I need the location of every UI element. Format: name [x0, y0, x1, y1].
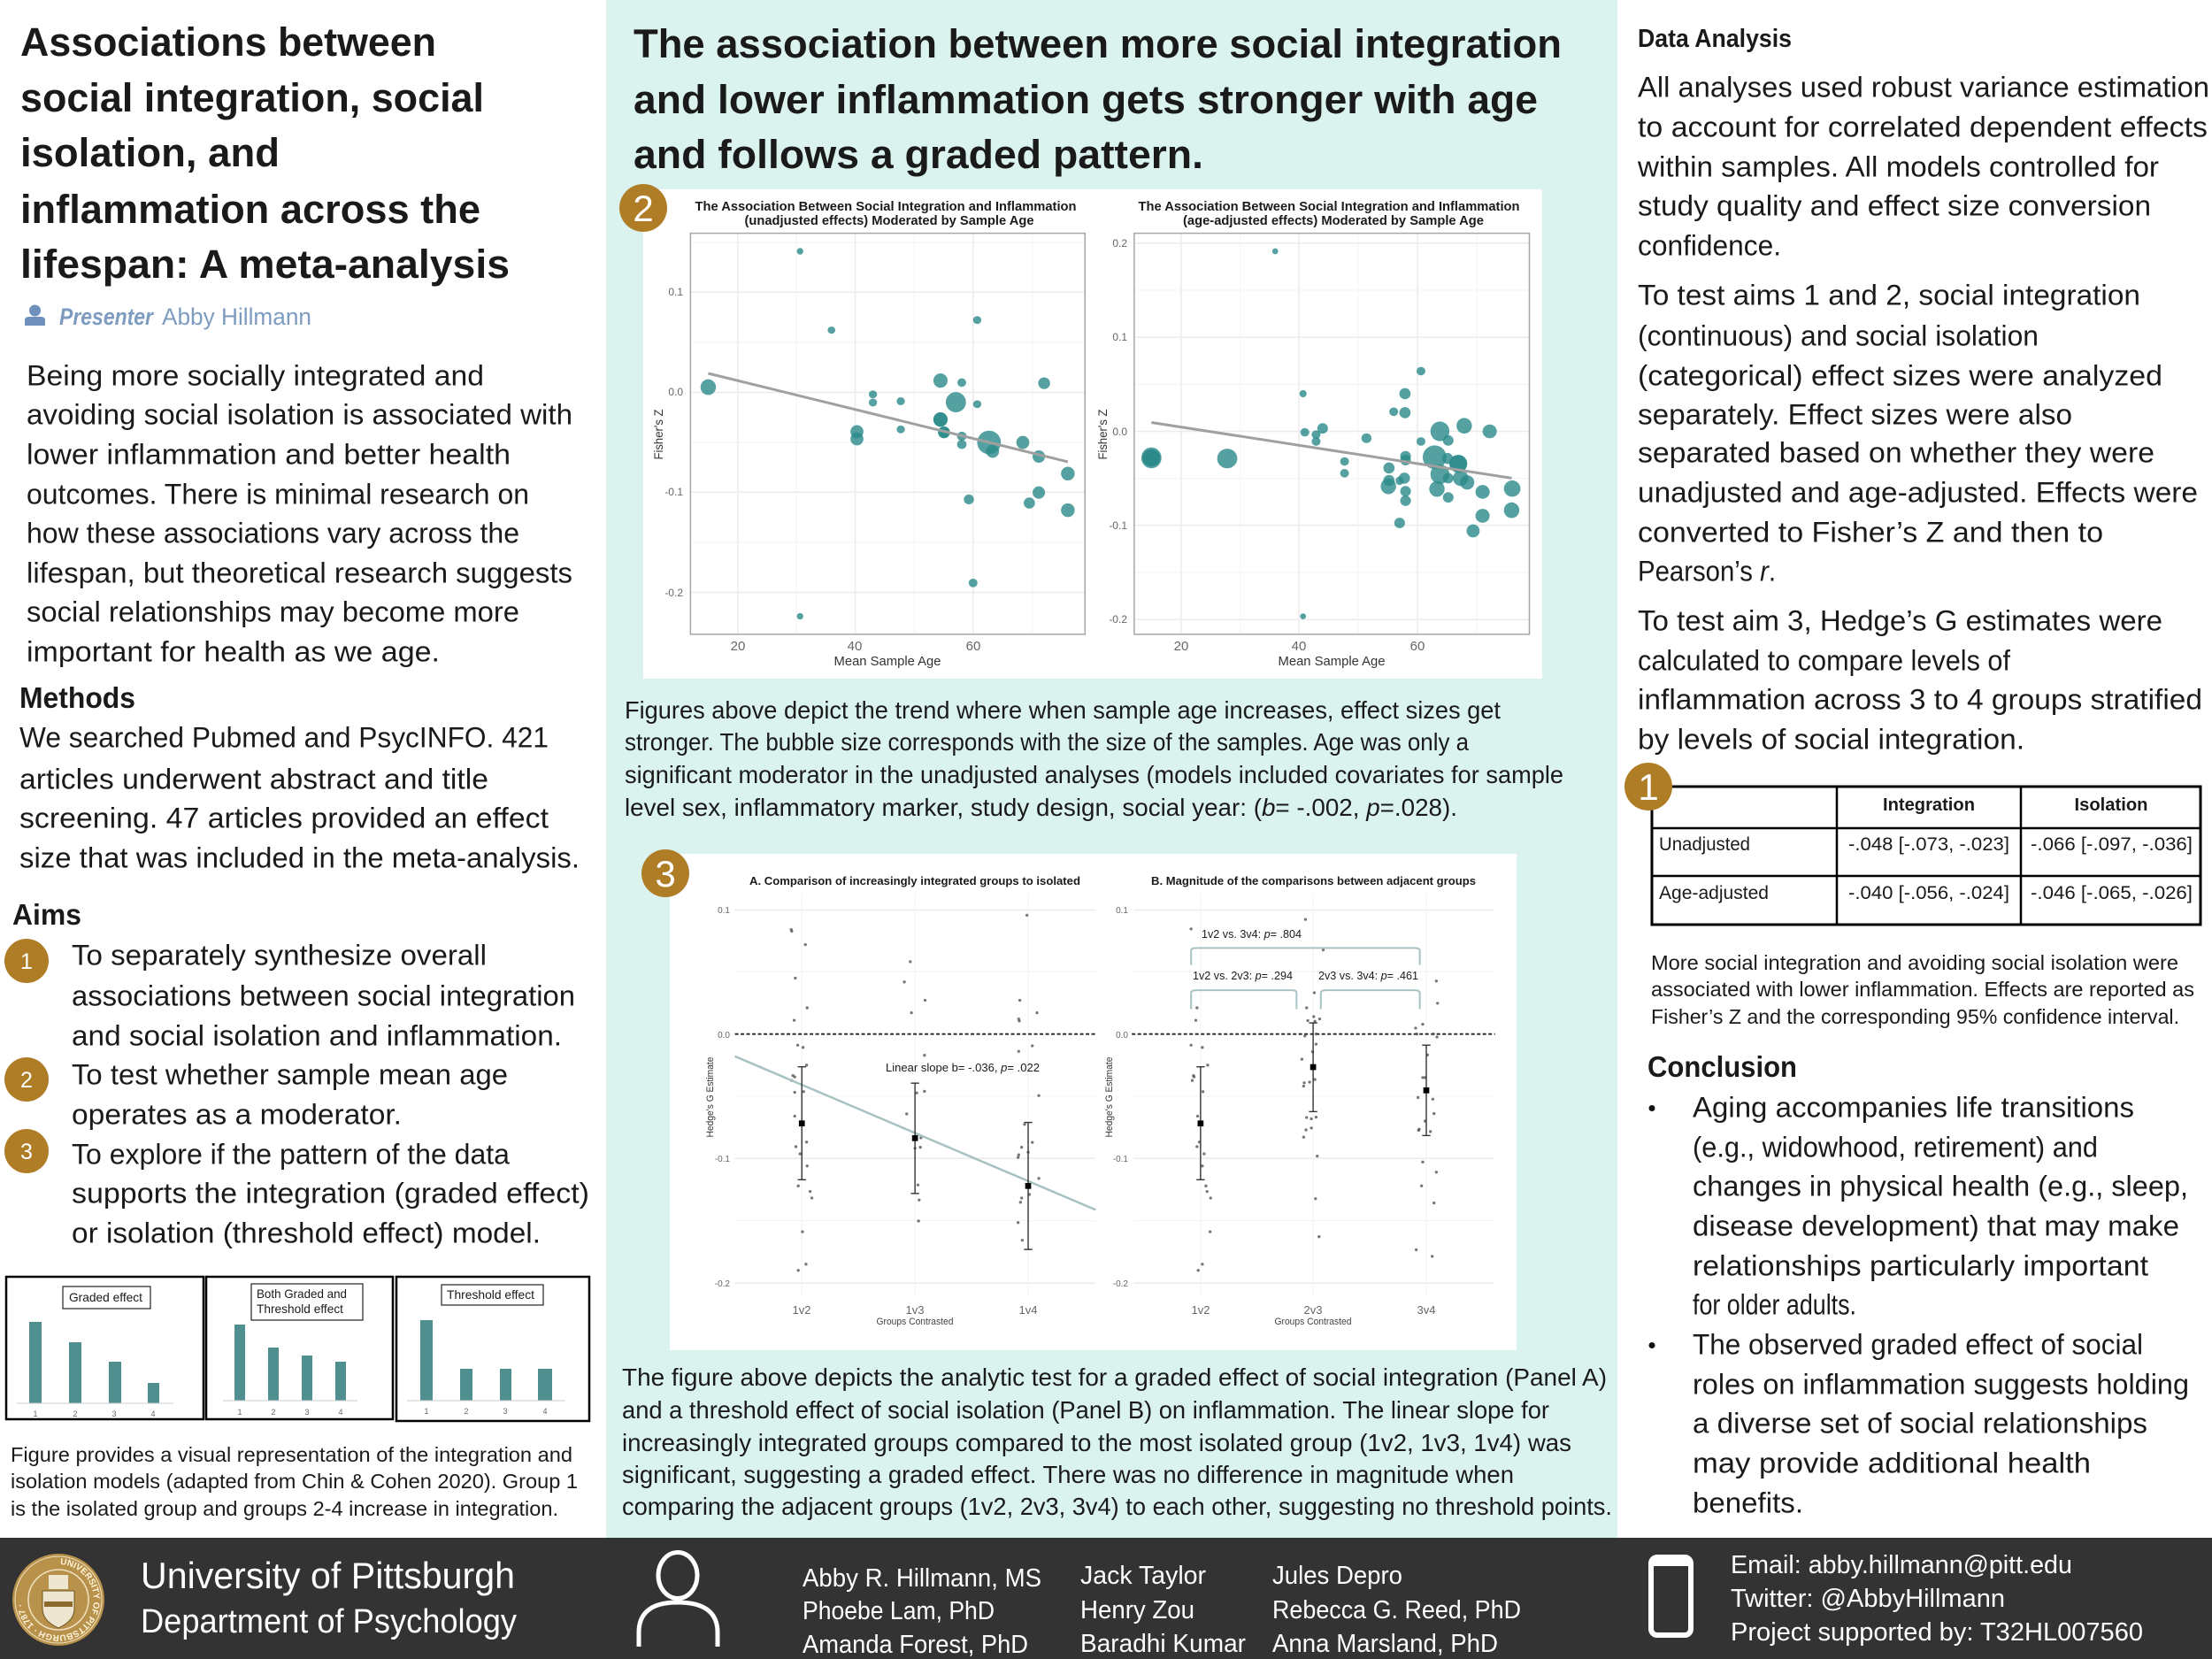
conclusion bullets: disease development) that may make: [1693, 1210, 2179, 1242]
table caption: Fisher’s Z and the corresponding 95% confidence interval.: [1651, 1005, 2179, 1028]
chart: unadjusted bubble plot: 20: [731, 639, 745, 654]
data analysis text: All analyses used robust variance estimation: [1638, 71, 2209, 103]
data analysis text: Pearson’s r.: [1638, 556, 1776, 588]
chart: panel A graded comparison: 1v2: [793, 1303, 810, 1317]
authors list: Henry Zou: [1080, 1596, 1194, 1624]
presenter line: Abby Hillmann: [162, 303, 311, 330]
icon: aim badge 1: 1: [20, 949, 33, 974]
heading: data analysis: Data Analysis: [1638, 25, 1792, 53]
chart: graded effect schematic: Graded effect: [69, 1290, 142, 1304]
data analysis text: converted to Fisher’s Z and then to: [1638, 517, 2103, 549]
aims text: associations between social integration: [72, 980, 575, 1012]
aims text: To test whether sample mean age: [72, 1058, 508, 1090]
figure 3 caption: increasingly integrated groups compared to the most isolated group (1v2, 1v3, 1v4) was: [622, 1429, 1571, 1456]
chart: panel A graded comparison: [705, 874, 1095, 1327]
table caption: associated with lower inflammation. Effects are reported as: [1651, 978, 2194, 1001]
chart: unadjusted bubble plot: Mean Sample Age: [833, 654, 941, 669]
conclusion bullets: for older adults.: [1693, 1288, 1856, 1320]
chart: age-adjusted bubble plot: 0.1: [1112, 331, 1127, 343]
chart: graded effect schematic: 4: [150, 1409, 156, 1418]
chart: unadjusted bubble plot: -0.1: [664, 486, 683, 498]
icon: table badge 1: 1: [1638, 766, 1659, 808]
chart: panel B threshold comparison: -0.2: [1113, 1279, 1128, 1289]
chart: graded effect schematic: 2: [73, 1409, 78, 1418]
icon: person outline: [639, 1552, 718, 1647]
data analysis text: separately. Effect sizes were also: [1638, 398, 2072, 430]
aims text: or isolation (threshold effect) model.: [72, 1217, 541, 1249]
intro text: [27, 359, 572, 667]
icon: aim badge 2: 2: [20, 1068, 33, 1093]
authors list: Jack Taylor: [1080, 1562, 1206, 1590]
chart: age-adjusted bubble plot: -0.1: [1109, 519, 1127, 532]
figure 3 caption: The figure above depicts the analytic test for a graded effect of social integration (Panel A): [622, 1363, 1607, 1391]
chart: panel A graded comparison: Hedge's G Estimate: [705, 1056, 716, 1138]
chart: unadjusted bubble plot: Fisher's Z: [651, 409, 665, 460]
intro text: Being more socially integrated and: [27, 359, 484, 391]
main heading: and follows a graded pattern.: [634, 132, 1203, 177]
figure 3 white panel: [670, 854, 1517, 1350]
conclusion bullets: a diverse set of social relationships: [1693, 1407, 2147, 1439]
chart: panel A graded comparison: Groups Contrasted: [876, 1317, 954, 1327]
data analysis text: calculated to compare levels of: [1638, 644, 2010, 676]
icon: phone: [1651, 1557, 1691, 1635]
chart: both graded and threshold schematic: 2: [271, 1408, 276, 1417]
table: overall effects: Unadjusted: [1659, 834, 1750, 855]
chart: age-adjusted bubble plot: -0.2: [1109, 613, 1127, 626]
authors list: Rebecca G. Reed, PhD: [1272, 1596, 1521, 1624]
data analysis text: study quality and effect size conversion: [1638, 189, 2151, 221]
chart: age-adjusted bubble plot: 0.2: [1112, 237, 1127, 250]
chart: unadjusted bubble plot: The Association Between Social Integration and Inflammation: [695, 199, 1076, 214]
panel: center column: [619, 21, 1612, 1520]
chart: panel B threshold comparison: Hedge's G Estimate: [1104, 1056, 1115, 1138]
chart: threshold effect schematic: 2: [464, 1407, 469, 1416]
intro text: important for health as we age.: [27, 635, 440, 667]
icon: figure badge 2: [619, 184, 667, 232]
aims text: and social isolation and inflammation.: [72, 1019, 562, 1051]
conclusion bullets: changes in physical health (e.g., sleep,: [1693, 1170, 2188, 1202]
icon: figure badge 3: 3: [655, 853, 676, 895]
university name: University of Pittsburgh: [141, 1555, 515, 1596]
conclusion bullets: benefits.: [1693, 1486, 1803, 1518]
chart: panel B threshold comparison: 3v4: [1417, 1303, 1435, 1317]
chart: age-adjusted bubble plot: [1095, 199, 1530, 669]
intro text: lower inflammation and better health: [27, 439, 511, 471]
methods text: size that was included in the meta-analysis.: [19, 842, 580, 874]
icon: university seal: UNIVERSITY OF PITTSBURGH · 1787 ·: [18, 1558, 100, 1641]
table: overall effects: Age-adjusted: [1659, 883, 1769, 903]
conclusion bullets: may provide additional health: [1693, 1448, 2091, 1479]
data analysis text: To test aim 3, Hedge’s G estimates were: [1638, 605, 2162, 637]
data analysis text: confidence.: [1638, 230, 1781, 262]
chart: both graded and threshold schematic: 1: [237, 1408, 242, 1417]
chart: both graded and threshold schematic: 3: [304, 1408, 310, 1417]
schematic caption: [11, 1443, 578, 1520]
chart: panel B threshold comparison: 2v3 vs. 3v4: p= .461: [1318, 969, 1418, 982]
chart: unadjusted bubble plot: 0.0: [668, 386, 683, 398]
chart: both graded and threshold schematic: 4: [338, 1408, 343, 1417]
conclusion bullets: The observed graded effect of social: [1693, 1329, 2143, 1361]
chart: panel B threshold comparison: -0.1: [1113, 1155, 1128, 1164]
methods text: We searched Pubmed and PsycINFO. 421: [19, 722, 549, 754]
chart: age-adjusted bubble plot: Mean Sample Age: [1278, 654, 1386, 669]
conclusion bullets: [1649, 1092, 2189, 1518]
presenter line: [25, 303, 311, 330]
chart: panel B threshold comparison: Groups Contrasted: [1274, 1317, 1352, 1327]
chart: age-adjusted bubble plot: The Association Between Social Integration and Inflammation: [1138, 199, 1520, 214]
contact details: Project supported by: T32HL007560: [1731, 1618, 2143, 1647]
chart: both graded and threshold schematic: [206, 1277, 393, 1419]
chart: age-adjusted bubble plot: Fisher's Z: [1095, 409, 1110, 460]
title: inflammation across the: [20, 187, 480, 232]
authors list: [803, 1562, 1521, 1659]
data analysis text: (continuous) and social isolation: [1638, 320, 2039, 352]
chart: panel A graded comparison: 1v4: [1019, 1303, 1037, 1317]
icon: table badge 1: [1624, 763, 1672, 810]
authors list: Abby R. Hillmann, MS: [803, 1564, 1041, 1593]
table: overall effects: [1652, 787, 2200, 925]
chart: panel B threshold comparison: B. Magnitude of the comparisons between adjacent groups: [1151, 874, 1476, 887]
title: isolation, and: [20, 130, 280, 175]
chart: panel A graded comparison: -0.1: [715, 1155, 730, 1164]
figure 2 caption: level sex, inflammatory marker, study design, social year: ( b= -.002, p=.028).: [625, 794, 1457, 821]
aims text: [72, 940, 589, 1249]
chart: panel A graded comparison: 0.0: [718, 1031, 730, 1041]
data analysis text: (categorical) effect sizes were analyzed: [1638, 359, 2162, 391]
figure 2 caption: Figures above depict the trend where when sample age increases, effect sizes get: [625, 696, 1501, 724]
chart: panel A graded comparison: 0.1: [718, 906, 730, 916]
authors list: Amanda Forest, PhD: [803, 1631, 1028, 1659]
chart: panel B threshold comparison: 0.0: [1116, 1031, 1128, 1041]
schematic caption: Figure provides a visual representation of the integration and: [11, 1443, 572, 1466]
chart: threshold effect schematic: Threshold effect: [447, 1287, 534, 1302]
contact details: Twitter: @AbbyHillmann: [1731, 1585, 2005, 1613]
methods text: articles underwent abstract and title: [19, 763, 488, 795]
aims text: To separately synthesize overall: [72, 940, 487, 972]
icon: aim badge 3: 3: [20, 1140, 33, 1164]
panel: right column: [1624, 25, 2209, 1518]
contact details: Email: abby.hillmann@pitt.edu: [1731, 1551, 2072, 1579]
data analysis text: To test aims 1 and 2, social integration: [1638, 280, 2140, 311]
table caption: [1651, 951, 2194, 1028]
chart: panel A graded comparison: 1v3: [906, 1303, 924, 1317]
data analysis text: [1637, 71, 2209, 756]
data analysis text: inflammation across 3 to 4 groups stratified: [1638, 683, 2202, 715]
main heading: and lower inflammation gets stronger with age: [634, 77, 1538, 122]
table: overall effects: -.046 [-.065, -.026]: [2031, 883, 2193, 903]
chart: unadjusted bubble plot: -0.2: [664, 587, 683, 599]
chart: age-adjusted bubble plot: 40: [1292, 639, 1306, 654]
chart: both graded and threshold schematic: Both Graded and: [257, 1286, 347, 1301]
heading: methods: Methods: [19, 681, 135, 714]
intro text: outcomes. There is minimal research on: [27, 478, 529, 510]
authors list: Anna Marsland, PhD: [1272, 1630, 1498, 1658]
authors list: Jules Depro: [1272, 1562, 1402, 1590]
figure 2 caption: [625, 696, 1563, 821]
chart: unadjusted bubble plot: 0.1: [668, 286, 683, 298]
footer band: [0, 1538, 2212, 1659]
figure 3 caption: comparing the adjacent groups (1v2, 2v3, 3v4) to each other, suggesting no threshold points.: [622, 1493, 1612, 1520]
chart: unadjusted bubble plot: (unadjusted effects) Moderated by Sample Age: [745, 213, 1033, 228]
data analysis text: within samples. All models controlled for: [1637, 150, 2159, 182]
table: overall effects: Integration: [1883, 795, 1975, 815]
conclusion bullets: relationships particularly important: [1693, 1249, 2148, 1281]
icon: aim badge 3: [4, 1129, 49, 1173]
contact details: [1731, 1551, 2143, 1647]
icon: aim badge 2: [4, 1057, 49, 1102]
chart: unadjusted bubble plot: 60: [966, 639, 980, 654]
chart: panel B threshold comparison: 2v3: [1304, 1303, 1322, 1317]
figure 3 caption: significant, suggesting a graded effect. There was no difference in magnitude when: [622, 1461, 1514, 1488]
intro text: social relationships may become more: [27, 596, 519, 628]
chart: panel B threshold comparison: 0.1: [1116, 906, 1128, 916]
chart: threshold effect schematic: 1: [424, 1407, 429, 1416]
title: lifespan: A meta-analysis: [20, 242, 510, 287]
conclusion bullets: (e.g., widowhood, retirement) and: [1693, 1131, 2098, 1163]
chart: both graded and threshold schematic: Threshold effect: [257, 1302, 343, 1316]
conclusion bullets: Aging accompanies life transitions: [1693, 1092, 2134, 1124]
chart: graded effect schematic: [6, 1277, 204, 1419]
chart: age-adjusted bubble plot: 60: [1410, 639, 1425, 654]
table: overall effects: -.040 [-.056, -.024]: [1848, 883, 2009, 903]
schematic caption: isolation models (adapted from Chin & Cohen 2020). Group 1: [11, 1470, 578, 1493]
title: social integration, social: [20, 75, 484, 120]
title: Associations between: [20, 19, 436, 65]
title: [20, 19, 510, 287]
figure 2 caption: stronger. The bubble size corresponds with the size of the samples. Age was only a: [625, 728, 1470, 756]
chart: threshold effect schematic: 4: [542, 1407, 548, 1416]
chart: panel A graded comparison: Linear slope b= -.036, p= .022: [886, 1061, 1040, 1074]
chart: graded effect schematic: 3: [111, 1409, 117, 1418]
figure 3 caption: and a threshold effect of social isolation (Panel B) on inflammation. The linear slope for: [622, 1396, 1549, 1424]
chart: panel B threshold comparison: 1v2 vs. 3v4: p= .804: [1202, 927, 1302, 941]
chart: panel B threshold comparison: 1v2 vs. 2v3: p= .294: [1193, 969, 1293, 982]
table caption: More social integration and avoiding social isolation were: [1651, 951, 2178, 974]
table: overall effects: -.066 [-.097, -.036]: [2031, 834, 2193, 855]
chart: age-adjusted bubble plot: 0.0: [1112, 426, 1127, 438]
chart: threshold effect schematic: 3: [503, 1407, 508, 1416]
chart: graded effect schematic: 1: [33, 1409, 38, 1418]
authors list: Phoebe Lam, PhD: [803, 1597, 995, 1625]
conclusion bullets: roles on inflammation suggests holding: [1693, 1368, 2189, 1400]
authors list: Baradhi Kumar: [1080, 1630, 1246, 1658]
intro text: avoiding social isolation is associated with: [27, 398, 572, 430]
icon: figure badge 2: 2: [633, 188, 654, 229]
aims text: To explore if the pattern of the data: [72, 1138, 510, 1170]
aims text: operates as a moderator.: [72, 1099, 402, 1131]
panel: left column: [4, 19, 589, 1520]
methods text: screening. 47 articles provided an effect: [19, 802, 549, 833]
heading: aims: Aims: [12, 898, 81, 931]
panel: center column background: [606, 0, 1617, 1538]
table: overall effects: -.048 [-.073, -.023]: [1848, 834, 2009, 855]
main heading: [634, 21, 1562, 177]
chart: panel B threshold comparison: [1104, 874, 1495, 1327]
intro text: how these associations vary across the: [27, 517, 519, 549]
chart: unadjusted bubble plot: 40: [848, 639, 862, 654]
chart: unadjusted bubble plot: [651, 199, 1085, 669]
figure 2 caption: significant moderator in the unadjusted analyses (models included covariates for sample: [625, 761, 1563, 788]
heading: conclusion: Conclusion: [1647, 1050, 1797, 1083]
chart: panel A graded comparison: -0.2: [715, 1279, 730, 1289]
presenter line: Presenter: [59, 303, 154, 330]
figure 3 caption: [622, 1363, 1612, 1520]
data analysis text: unadjusted and age-adjusted. Effects were: [1638, 476, 2198, 508]
data analysis text: to account for correlated dependent effects: [1638, 111, 2208, 143]
data analysis text: by levels of social integration.: [1638, 724, 2024, 756]
aims text: supports the integration (graded effect): [72, 1177, 589, 1209]
data analysis text: separated based on whether they were: [1638, 437, 2154, 469]
chart: panel B threshold comparison: 1v2: [1192, 1303, 1210, 1317]
chart: panel A graded comparison: A. Comparison of increasingly integrated groups to isolated: [749, 874, 1080, 887]
figure 2 white panel: [643, 189, 1542, 679]
icon: figure badge 3: [641, 849, 689, 897]
intro text: lifespan, but theoretical research suggests: [27, 557, 572, 589]
methods text: [19, 722, 580, 874]
chart: age-adjusted bubble plot: 20: [1174, 639, 1188, 654]
department name: Department of Psychology: [141, 1603, 517, 1640]
icon: aim badge 1: [4, 939, 49, 983]
main heading: The association between more social integration: [634, 21, 1562, 66]
table: overall effects: Isolation: [2074, 795, 2148, 815]
chart: threshold effect schematic: [396, 1277, 589, 1421]
schematic caption: is the isolated group and groups 2-4 increase in integration.: [11, 1497, 558, 1520]
chart: age-adjusted bubble plot: (age-adjusted effects) Moderated by Sample Age: [1183, 213, 1484, 228]
